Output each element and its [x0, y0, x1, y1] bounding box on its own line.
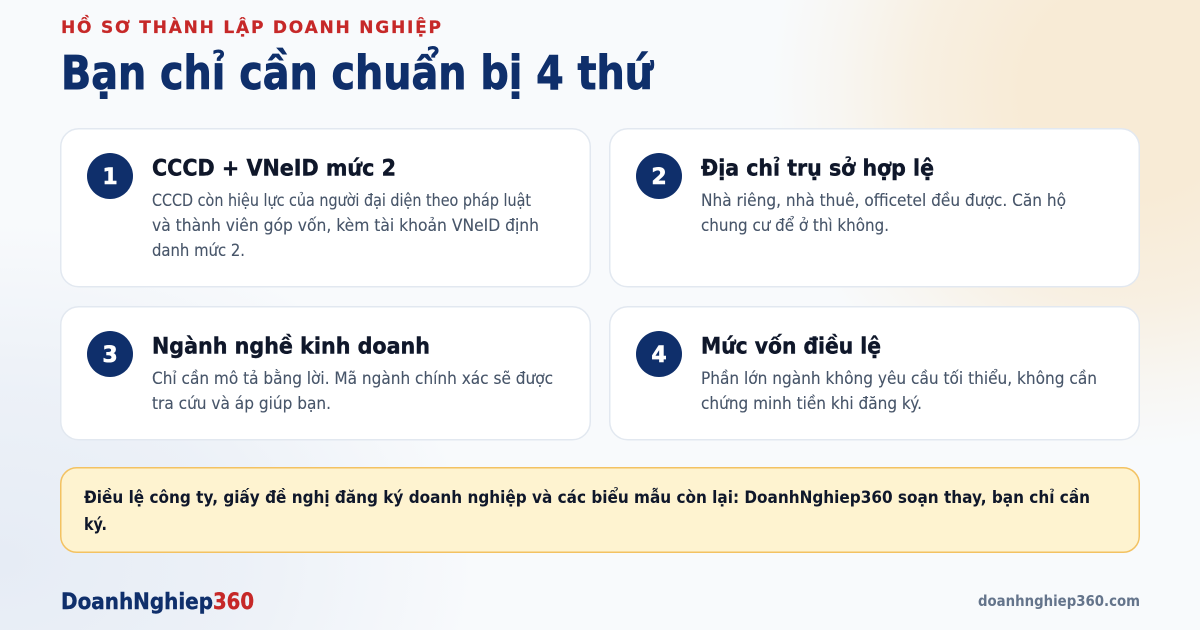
logo wordmark: DoanhNghiep	[61, 590, 213, 615]
website url: doanhnghiep360.com	[978, 592, 1140, 610]
callout	[61, 468, 1139, 552]
card 1 text: CCCD còn hiệu lực của người đại diện theo pháp luật	[152, 191, 531, 210]
icon: number 4: 4	[651, 343, 667, 368]
card 3 text: Chỉ cần mô tả bằng lời. Mã ngành chính xác sẽ được	[152, 369, 553, 388]
icon: number 2: 2	[651, 165, 667, 190]
icon: number 3	[87, 331, 133, 377]
card 3 text	[152, 369, 553, 413]
card 3 text: tra cứu và áp giúp bạn.	[152, 394, 331, 413]
icon: number 3: 3	[102, 343, 118, 368]
card 1 text: danh mức 2.	[152, 241, 245, 260]
card 1 text: và thành viên góp vốn, kèm tài khoản VNeID định	[152, 216, 539, 235]
panel: card 2	[610, 129, 1139, 287]
card 2 text: Nhà riêng, nhà thuê, officetel đều được. Căn hộ	[701, 191, 1066, 210]
title: Bạn chỉ cần chuẩn bị 4 thứ	[61, 46, 654, 100]
callout text	[84, 488, 1090, 534]
card 4 text	[701, 369, 1097, 413]
callout text: ký.	[84, 515, 107, 534]
card 3 heading: Ngành nghề kinh doanh	[152, 332, 430, 360]
card 2 text	[701, 191, 1066, 235]
card 4 text: Phần lớn ngành không yêu cầu tối thiểu, không cần	[701, 369, 1097, 388]
card 2 heading: Địa chỉ trụ sở hợp lệ	[701, 156, 934, 182]
card 2 text: chung cư để ở thì không.	[701, 216, 889, 235]
card 1 text	[152, 191, 539, 260]
logo number: 360	[213, 590, 254, 615]
icon: number 2	[636, 153, 682, 199]
card 1 heading: CCCD + VNeID mức 2	[152, 156, 396, 182]
panel: card 4	[610, 307, 1139, 440]
icon: number 1: 1	[102, 165, 118, 190]
eyebrow heading: HỒ SƠ THÀNH LẬP DOANH NGHIỆP	[61, 14, 441, 38]
panel: card 1	[61, 129, 590, 287]
callout text: Điều lệ công ty, giấy đề nghị đăng ký doanh nghiệp và các biểu mẫu còn lại: DoanhNghiep360 soạn thay, bạn chỉ cần	[84, 488, 1090, 507]
icon: number 1	[87, 153, 133, 199]
card 4 heading: Mức vốn điều lệ	[701, 332, 881, 360]
icon: number 4	[636, 331, 682, 377]
card 4 text: chứng minh tiền khi đăng ký.	[701, 394, 922, 413]
panel: card 3	[61, 307, 590, 440]
